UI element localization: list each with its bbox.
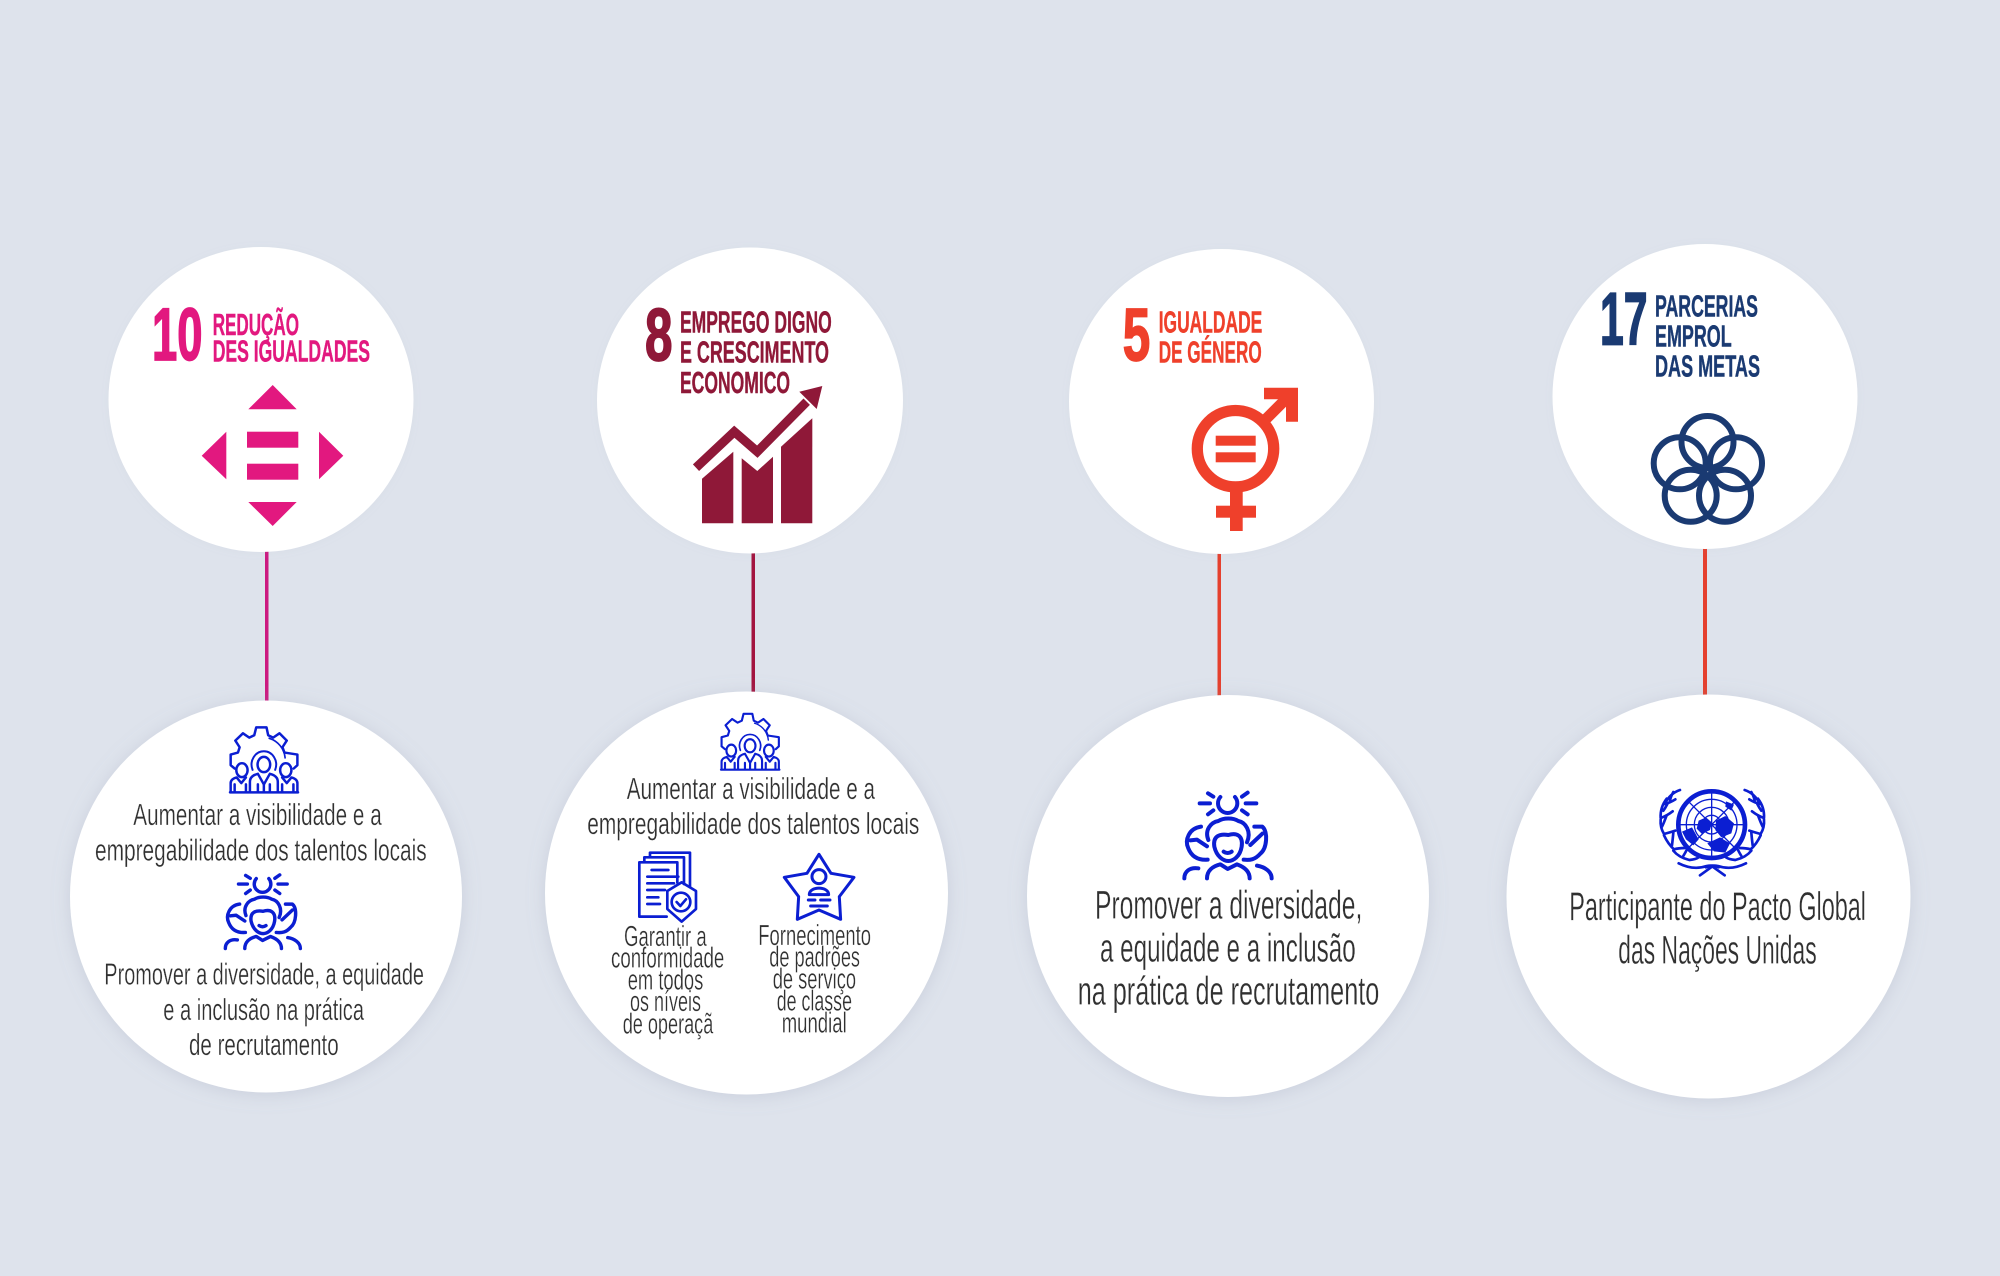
icon: diverse crowd xyxy=(1184,793,1272,878)
heading: 8 Emprego digno: 8 xyxy=(645,294,672,377)
text: Global Compact xyxy=(1569,885,1866,972)
text: service standards xyxy=(758,920,871,1039)
panel: SDG 17 xyxy=(1552,244,1858,549)
icon: growth chart xyxy=(696,386,822,523)
icon: gear and people xyxy=(230,727,298,792)
heading: 5 Igualdade de género: 5 xyxy=(1123,294,1150,377)
circle: SDG 8 xyxy=(597,248,903,554)
icon: compliance document xyxy=(639,853,696,922)
icon: five interlocking rings xyxy=(1654,416,1762,522)
text: service standards: mundial xyxy=(782,1007,847,1039)
heading: 17 Parcerias xyxy=(1600,277,1760,383)
heading: 17 Parcerias: DAS METAS xyxy=(1655,348,1760,383)
heading: 8 Emprego digno: EMPREGO DIGNO xyxy=(680,304,832,339)
circle: actions 8 xyxy=(545,692,948,1094)
panel: SDG 10 xyxy=(108,247,414,552)
circle: SDG 5 xyxy=(1069,249,1374,554)
heading: 5 Igualdade de género xyxy=(1123,294,1262,377)
heading: 10 Redução das desigualdades: DES IGUALDADES xyxy=(213,334,370,368)
panel: SDG 10 actions xyxy=(70,700,462,1092)
text: compliance: de operaçã xyxy=(623,1008,714,1040)
panel: SDG 8 xyxy=(597,248,903,554)
text: compliance: os níveis xyxy=(630,986,701,1018)
text: diversity: a equidade e a inclusão xyxy=(1100,927,1356,971)
circle: SDG 10 xyxy=(108,247,414,552)
heading: 10 Redução das desigualdades xyxy=(152,293,370,376)
text: compliance: Garantir a xyxy=(624,921,707,953)
text: visibility: empregabilidade dos talentos locais xyxy=(587,806,919,841)
heading: 10 Redução das desigualdades: 10 xyxy=(152,293,202,376)
text: service standards: de serviço xyxy=(773,964,856,996)
panel: SDG 5 actions xyxy=(1027,695,1429,1097)
icon: diverse crowd xyxy=(225,875,300,948)
text: Global Compact: das Nações Unidas xyxy=(1618,928,1817,972)
icon: inequality arrows xyxy=(202,385,343,526)
circle: SDG 17 xyxy=(1552,244,1858,549)
text: diversity: e a inclusão na prática xyxy=(163,992,364,1027)
circle: actions 5 xyxy=(1027,695,1429,1097)
heading: 8 Emprego digno: E CRESCIMENTO xyxy=(680,335,829,370)
text: visibility xyxy=(587,771,919,841)
heading: 8 Emprego digno: ECONOMICO xyxy=(680,365,790,400)
icon: United Nations emblem xyxy=(1661,790,1764,875)
text: compliance: em todos xyxy=(628,964,703,996)
text: visibility: Aumentar a visibilidade e a xyxy=(133,797,382,832)
heading: 17 Parcerias: PARCERIAS xyxy=(1655,288,1758,323)
text: visibility xyxy=(95,797,427,868)
icon: gear and people xyxy=(721,714,779,770)
text: visibility: empregabilidade dos talentos locais xyxy=(95,833,427,868)
icon: gender equality xyxy=(1197,388,1298,531)
panel: SDG 17 actions xyxy=(1506,694,1910,1098)
text: visibility: Aumentar a visibilidade e a xyxy=(627,771,876,806)
heading: 5 Igualdade de género: DE GÉNERO xyxy=(1159,335,1262,370)
text: service standards: de padrões xyxy=(769,942,860,974)
panel: SDG 5 xyxy=(1069,249,1374,554)
heading: 5 Igualdade de género: IGUALDADE xyxy=(1159,305,1262,340)
text: diversity: Promover a diversidade, a equidade xyxy=(104,956,424,991)
circle: actions 10 xyxy=(70,700,462,1092)
panel: SDG 8 actions xyxy=(545,692,948,1094)
text: diversity: na prática de recrutamento xyxy=(1078,969,1379,1013)
text: compliance xyxy=(611,921,724,1040)
heading: 17 Parcerias: EMPROL xyxy=(1655,318,1732,353)
text: compliance: conformidade xyxy=(611,943,724,975)
text: service standards: de classe xyxy=(777,986,852,1018)
text: diversity: de recrutamento xyxy=(189,1027,339,1062)
connector: SDG 8 xyxy=(752,551,755,693)
icon: star with person xyxy=(784,854,854,919)
text: diversity xyxy=(104,956,424,1062)
heading: 10 Redução das desigualdades: REDUÇÃO xyxy=(213,307,299,342)
circle: actions 17 xyxy=(1506,694,1910,1098)
text: diversity: Promover a diversidade, xyxy=(1095,883,1362,927)
connector: SDG 10 xyxy=(265,550,268,702)
text: service standards: Fornecimento xyxy=(758,920,871,952)
heading: 17 Parcerias: 17 xyxy=(1600,277,1648,360)
connector: SDG 17 xyxy=(1703,547,1707,697)
text: diversity xyxy=(1078,883,1379,1013)
heading: 8 Emprego digno xyxy=(645,294,832,400)
connector: SDG 5 xyxy=(1218,552,1221,697)
